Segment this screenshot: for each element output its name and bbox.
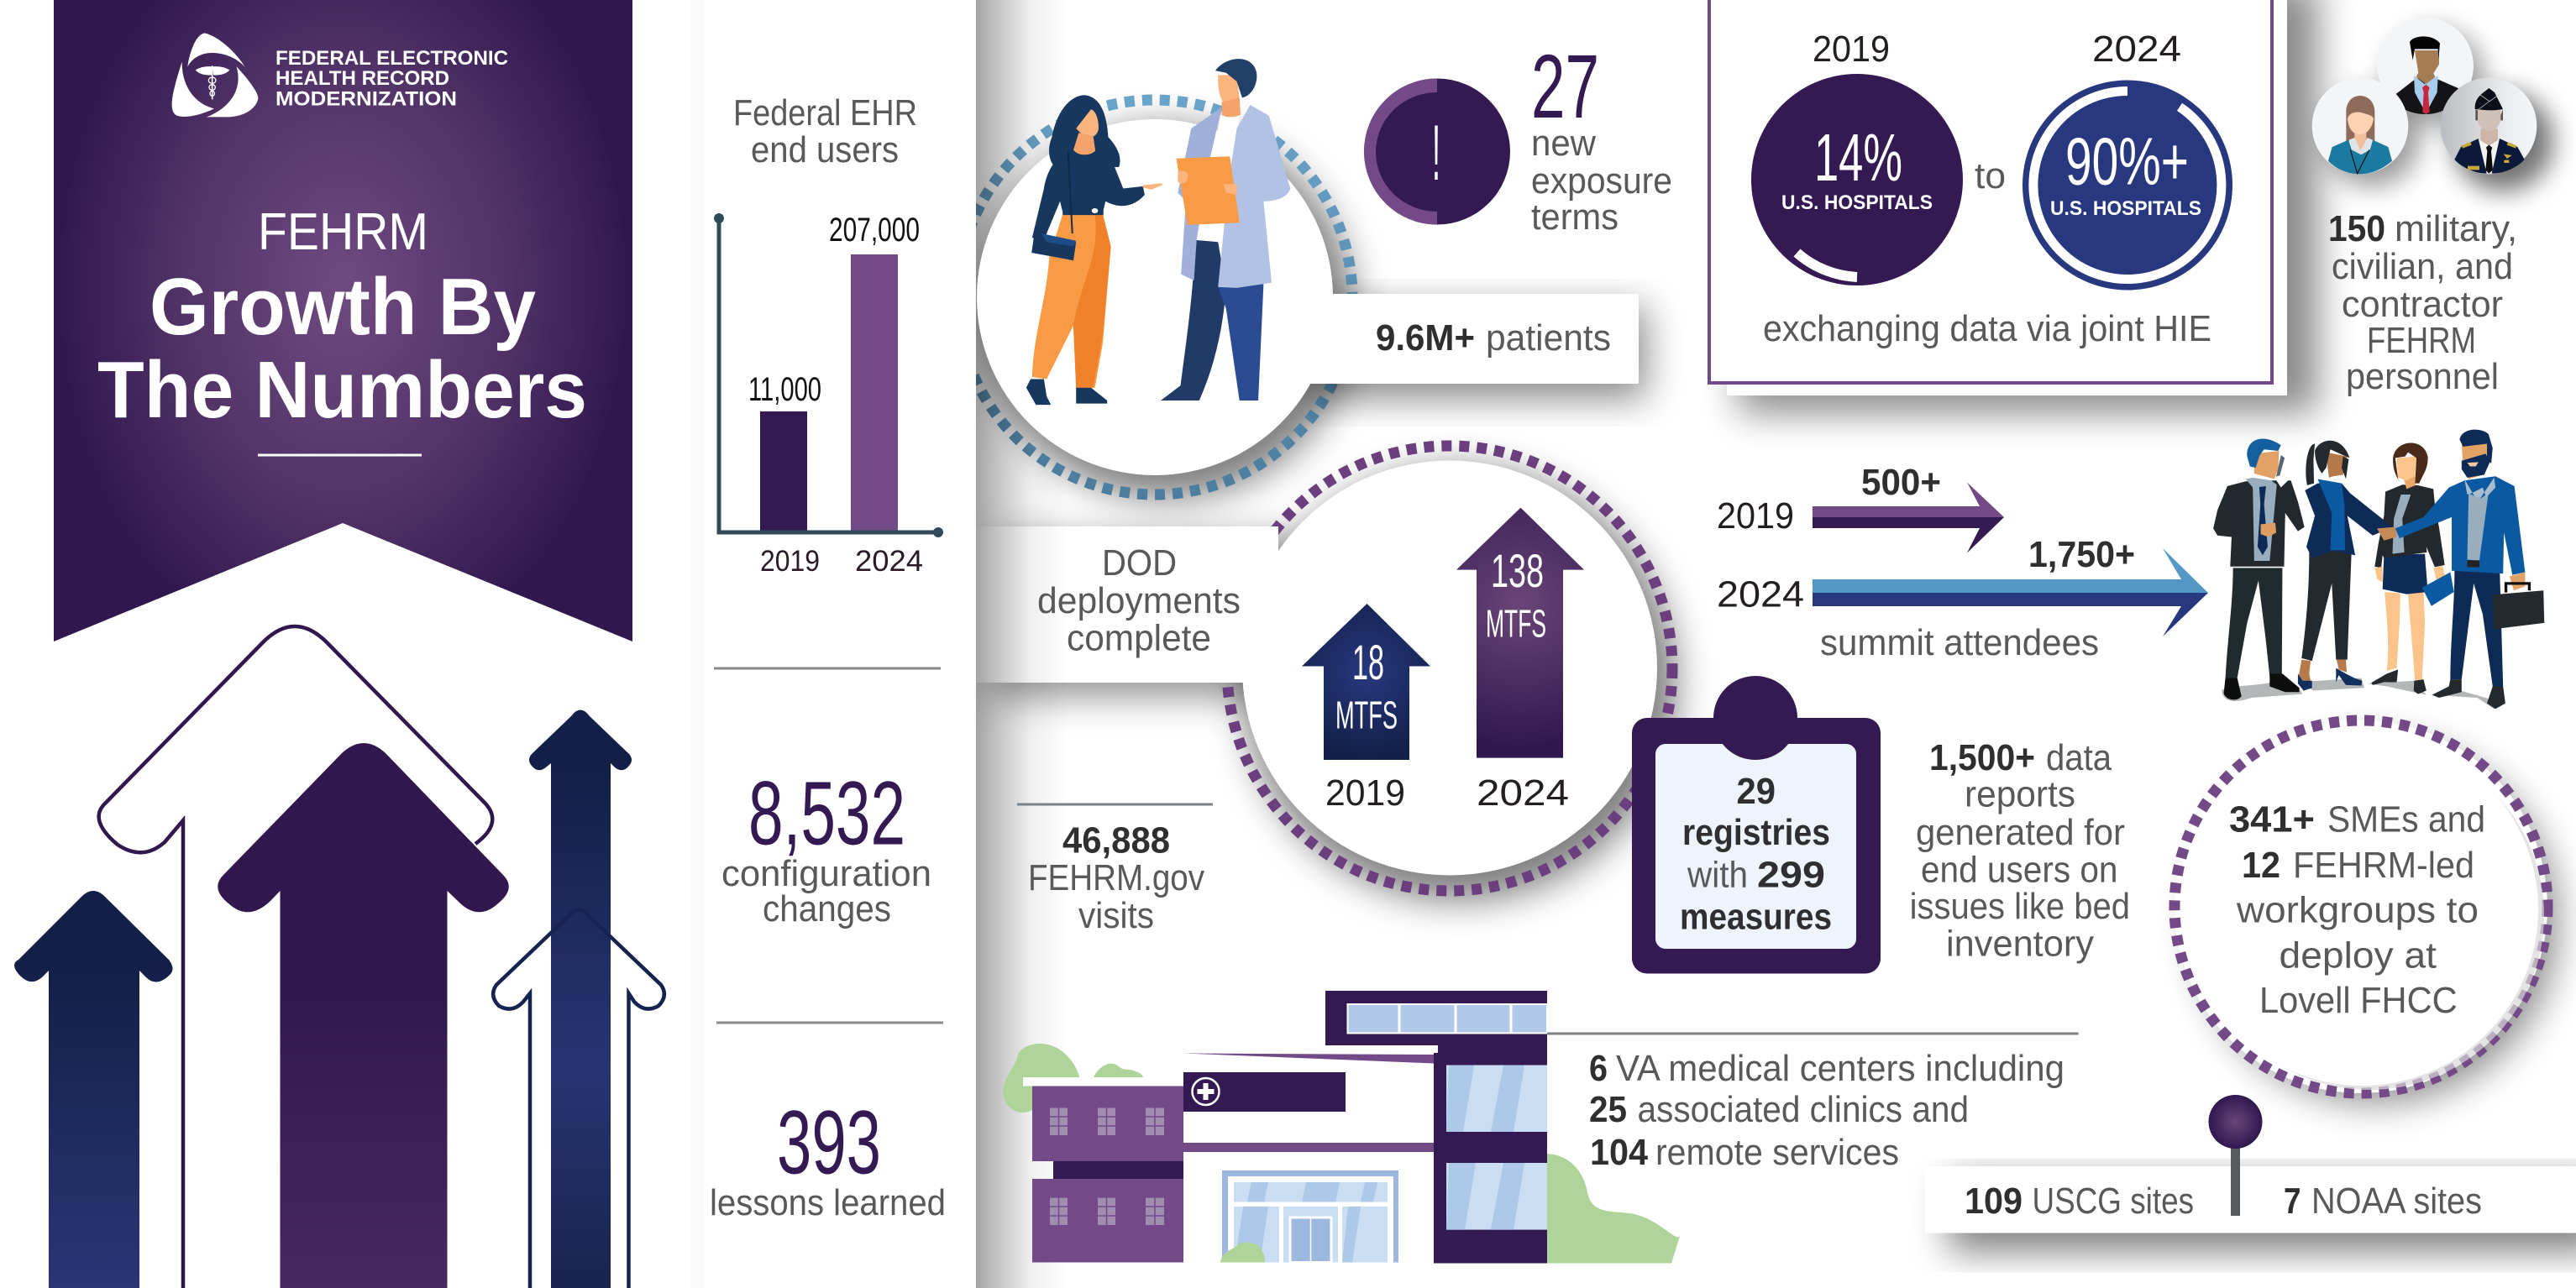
text: logo wordmark: FEDERAL ELECTRONIC: [275, 47, 508, 70]
arrow: 2024 138 MTFs: 138: [1491, 544, 1544, 597]
text: logo wordmark: HEALTH RECORD: [275, 67, 449, 90]
stat: 27 new exposure terms: new: [1531, 123, 1596, 164]
panel: stats column: [691, 0, 976, 1288]
stat: 393 lessons learned: lessons learned: [710, 1182, 946, 1223]
arrow: 2024 138 MTFs: MTFS: [1486, 602, 1546, 646]
title: Growth By: [150, 262, 536, 352]
text: DOD deployments complete: DOD: [1102, 542, 1177, 584]
logo: FEHRM mark: [172, 33, 258, 117]
icon: exclamation circle: [1364, 79, 1510, 225]
text: 150 personnel: personnel: [2346, 356, 2499, 397]
stat: 393 lessons learned: 393: [777, 1092, 881, 1193]
text: 150 personnel: military,: [2395, 208, 2517, 249]
circle: SMEs and workgroups: SMEs and: [2327, 799, 2485, 840]
avatar: contractor woman: [2312, 78, 2408, 174]
text: VA medical centers: 25: [1589, 1089, 1627, 1130]
label: 2019: 2019: [1813, 29, 1890, 70]
title: The Numbers: [97, 345, 587, 435]
bar chart: end users: 11,000: [748, 371, 821, 408]
stat: 27 new exposure terms: exposure: [1531, 160, 1672, 202]
text: 1,500+ data reports: generated for: [1916, 812, 2125, 853]
panel: USCG and NOAA sites: USCG sites: [2033, 1181, 2194, 1222]
icon: clipboard 29 registries: 299: [1757, 855, 1825, 895]
circle: 90%+ U.S. hospitals: U.S. HOSPITALS: [2050, 197, 2201, 220]
icon: clipboard 29 registries: with: [1687, 855, 1748, 895]
text: DOD deployments complete: deployments: [1037, 580, 1241, 621]
heading: Federal EHR end users: [733, 92, 917, 170]
circle: SMEs and workgroups: deploy at: [2280, 935, 2437, 976]
bar chart: end users: [714, 212, 943, 578]
illustration: hospital building: [1003, 991, 1680, 1263]
text: VA medical centers: associated clinics and: [1638, 1089, 1969, 1130]
panel: 9.6M+ patients: patients: [1486, 317, 1611, 359]
text: 150 personnel: contractor: [2342, 284, 2503, 325]
text: 150 personnel: 150: [2328, 208, 2385, 249]
illustration: business group: [2213, 430, 2544, 709]
arrow: 2019 18 MTFs: 18: [1352, 636, 1384, 690]
panel: 9.6M+ patients: 9.6M+: [1376, 317, 1475, 359]
icon: FEHRM personnel avatars: [2312, 18, 2553, 191]
text: logo wordmark: MODERNIZATION: [275, 87, 457, 111]
icon: clipboard 29 registries: [1632, 676, 1881, 974]
circle: SMEs and workgroups: 12: [2242, 845, 2280, 886]
circle: SMEs and workgroups: 341+: [2229, 799, 2315, 840]
heading: Federal EHR end users: end users: [751, 129, 899, 170]
text: VA medical centers: VA medical centers including: [1616, 1048, 2064, 1089]
panel: DOD deployments: [976, 526, 1278, 683]
text: VA medical centers: 104: [1590, 1132, 1648, 1173]
label: 2024: 2024: [1477, 772, 1569, 814]
circle: SMEs and workgroups: workgroups to: [2236, 890, 2479, 931]
icon: clipboard 29 registries: measures: [1680, 897, 1832, 938]
circle: 14% U.S. hospitals: 14%: [1814, 120, 1902, 195]
title: [97, 203, 587, 435]
circle: 14% U.S. hospitals: [1751, 74, 1963, 285]
chart: summit attendees arrows: 500+: [1861, 462, 1941, 503]
chart: summit attendees arrows: 2019: [1717, 495, 1794, 537]
text: 150 personnel: FEHRM: [2367, 320, 2476, 361]
circle: DOD MTF counts: [1242, 460, 1657, 875]
left edge shadow: [976, 0, 1068, 1288]
text: to: to: [1975, 155, 2006, 196]
circle: people illustration: [977, 59, 1333, 475]
text: VA medical centers: remote services: [1655, 1132, 1899, 1173]
stat: 27 new exposure terms: 27: [1531, 35, 1599, 137]
label: 2019: 2019: [1325, 772, 1405, 814]
text: VA medical centers: 6: [1589, 1048, 1608, 1089]
text: 1,500+ data reports: reports: [1965, 774, 2075, 815]
icon: clipboard 29 registries: 29: [1737, 771, 1776, 812]
title: FEHRM: [258, 203, 428, 261]
text: DOD deployments complete: [1037, 542, 1241, 658]
chart: summit attendees arrows: 1,750+: [2028, 534, 2135, 575]
stat: 8,532 configuration changes: [721, 762, 931, 929]
icon: clipboard 29 registries: registries: [1682, 812, 1830, 853]
circle: 14% U.S. hospitals: U.S. HOSPITALS: [1781, 191, 1933, 214]
circle: 90%+ U.S. hospitals: [2023, 81, 2232, 291]
stat: 8,532 configuration changes: configuration: [721, 853, 931, 894]
stat: 27 new exposure terms: [1531, 35, 1672, 238]
banner: title ribbon: [54, 0, 632, 641]
panel: 9.6M+ patients: [1260, 294, 1646, 399]
text: 1,500+ data reports: data: [2046, 737, 2112, 778]
text: 150 personnel: civilian, and: [2332, 246, 2513, 287]
avatar: military officer: [2441, 78, 2537, 174]
stat: 27 new exposure terms: terms: [1531, 196, 1619, 238]
arrow: 2019 18 MTFs: [1302, 604, 1430, 760]
text: 1,500+ data reports: end users on: [1921, 850, 2118, 890]
avatar: civilian man: [2377, 18, 2474, 114]
panel: USCG and NOAA sites: NOAA sites: [2311, 1181, 2482, 1222]
shadow and ring: circle two: [1227, 446, 1676, 901]
circle: SMEs and workgroups: FEHRM-led: [2293, 845, 2474, 886]
text: logo wordmark: [275, 47, 508, 111]
text: 46,888 FEHRM.gov visits: [1017, 804, 1213, 936]
circle: SMEs and workgroups: Lovell FHCC: [2259, 980, 2458, 1021]
panel: USCG and NOAA sites: [1925, 1166, 2576, 1251]
stat: 8,532 configuration changes: 8,532: [748, 762, 905, 864]
text: VA medical centers: [1547, 1034, 2079, 1173]
label: 2024: 2024: [2092, 29, 2181, 70]
text: DOD deployments complete: complete: [1067, 618, 1211, 658]
text: 150 personnel: [2328, 208, 2517, 397]
bar chart: end users: 207,000: [829, 212, 920, 249]
icon: pin divider: [2209, 1095, 2263, 1216]
chart: summit attendees arrows: [1717, 462, 2208, 663]
icon: growth arrows: [14, 626, 664, 1288]
text: exchanging data: exchanging data via joint HIE: [1763, 308, 2211, 349]
stat: 8,532 configuration changes: changes: [763, 888, 891, 929]
bar chart: end users: 2019: [760, 545, 820, 578]
text: 46,888 FEHRM.gov visits: visits: [1078, 895, 1154, 936]
text: 46,888 FEHRM.gov visits: FEHRM.gov: [1028, 857, 1204, 898]
circle: SMEs and workgroups: [2175, 720, 2558, 1102]
text: 1,500+ data reports: 1,500+: [1929, 737, 2035, 778]
text: 46,888 FEHRM.gov visits: 46,888: [1062, 820, 1170, 861]
shadow and ring: circle one: [957, 100, 1354, 499]
heading: Federal EHR end users: Federal EHR: [733, 92, 917, 134]
chart: summit attendees arrows: summit attendees: [1820, 622, 2099, 663]
panel: USCG and NOAA sites: 7: [2284, 1181, 2301, 1222]
arrow: 2024 138 MTFs: [1456, 508, 1584, 758]
circle: 90%+ U.S. hospitals: 90%+: [2065, 124, 2189, 198]
illustration: woman and clinician: [1026, 59, 1290, 405]
text: 1,500+ data reports: issues like bed: [1910, 886, 2130, 927]
panel: USCG and NOAA sites: 109: [1965, 1181, 2023, 1222]
text: 1,500+ data reports: inventory: [1946, 924, 2094, 964]
arrow: 2019 18 MTFs: MTFS: [1335, 694, 1398, 737]
stat: 393 lessons learned: [710, 1092, 946, 1223]
bar chart: end users: 2024: [855, 545, 923, 578]
shadow: DOD panel: [991, 537, 1293, 697]
text: 1,500+ data reports: [1910, 737, 2130, 964]
chart: summit attendees arrows: 2024: [1717, 574, 1804, 615]
panel: hospitals exchanging data: [1709, 0, 2318, 413]
icon: exclamation circle: !: [1432, 108, 1440, 196]
